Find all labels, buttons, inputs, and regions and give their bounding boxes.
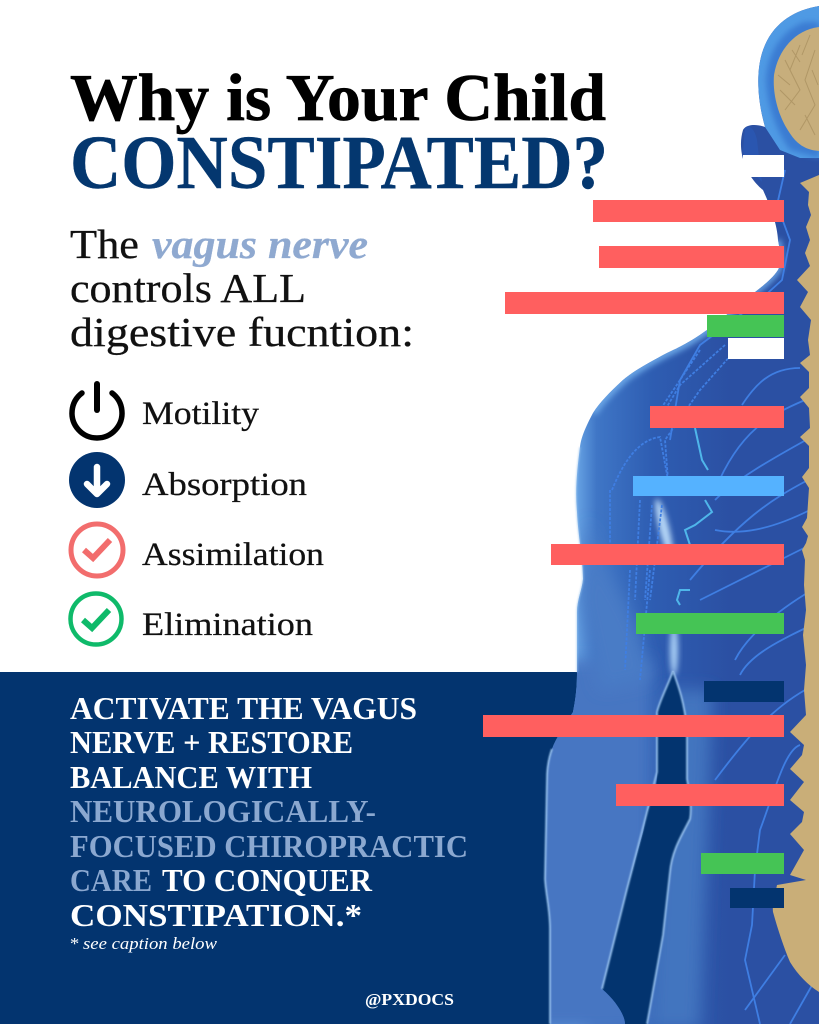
bar: white 2 [728, 338, 784, 359]
label: Elimination: Elimination [142, 607, 313, 643]
subheading line 2: controls ALL [70, 265, 306, 311]
limb edge highlights [545, 447, 691, 1024]
bar: green 2 [636, 613, 784, 634]
bar: red 7 [616, 784, 784, 806]
bar: red 5 [551, 544, 784, 565]
bar: red 6 [483, 715, 784, 737]
navy band [0, 672, 819, 1024]
label: Assimilation: Assimilation [142, 537, 324, 573]
label: Motility: Motility [142, 396, 260, 432]
title [70, 61, 608, 205]
handle: @PXDOCS [365, 990, 454, 1009]
line 6: TO CONQUER [162, 862, 373, 898]
line 7: CONSTIPATION.* [70, 897, 362, 933]
bar: red 3 [505, 292, 784, 314]
subheading highlight: vagus nerve: vagus nerve [152, 221, 368, 267]
title line 2: CONSTIPATED? [70, 121, 608, 205]
subheading line 3: digestive fucntion: [70, 309, 414, 355]
call to action text [70, 690, 468, 933]
bar: light blue [633, 476, 784, 496]
line 3: BALANCE WITH [70, 759, 312, 795]
line 2: NERVE + RESTORE [70, 724, 353, 760]
body silhouette [530, 0, 819, 1024]
icon: down arrow [69, 452, 125, 508]
bar: red 2 [599, 246, 784, 268]
bar: red 4 [650, 406, 784, 428]
spine [773, 175, 819, 992]
icon: red check [71, 524, 123, 576]
bar: navy 1 [704, 681, 784, 702]
bar: green 1 [707, 315, 784, 337]
indicator bars [483, 155, 784, 908]
footnote: * see caption below [69, 934, 218, 953]
list: digestive functions [69, 384, 324, 644]
brain [774, 27, 819, 151]
bar: green 3 [701, 853, 784, 874]
icon: power [72, 384, 122, 438]
label: Absorption: Absorption [142, 467, 307, 503]
title line 1: Why is Your Child [70, 61, 606, 135]
icon: green check [70, 594, 122, 644]
nerves [610, 170, 815, 1024]
bar: red 1 [593, 200, 784, 222]
line 6 highlight: CARE [70, 862, 152, 898]
line 1: ACTIVATE THE VAGUS [70, 690, 417, 726]
line 5: FOCUSED CHIROPRACTIC [70, 828, 468, 864]
bar: navy 2 [730, 888, 784, 908]
bright nerve details [677, 428, 712, 605]
line 4: NEUROLOGICALLY- [70, 793, 376, 829]
subheading [70, 221, 414, 355]
illustration: human body with spine and nerves [530, 0, 819, 1024]
bar: white C1 [743, 155, 784, 177]
subheading word: The: The [70, 221, 139, 267]
